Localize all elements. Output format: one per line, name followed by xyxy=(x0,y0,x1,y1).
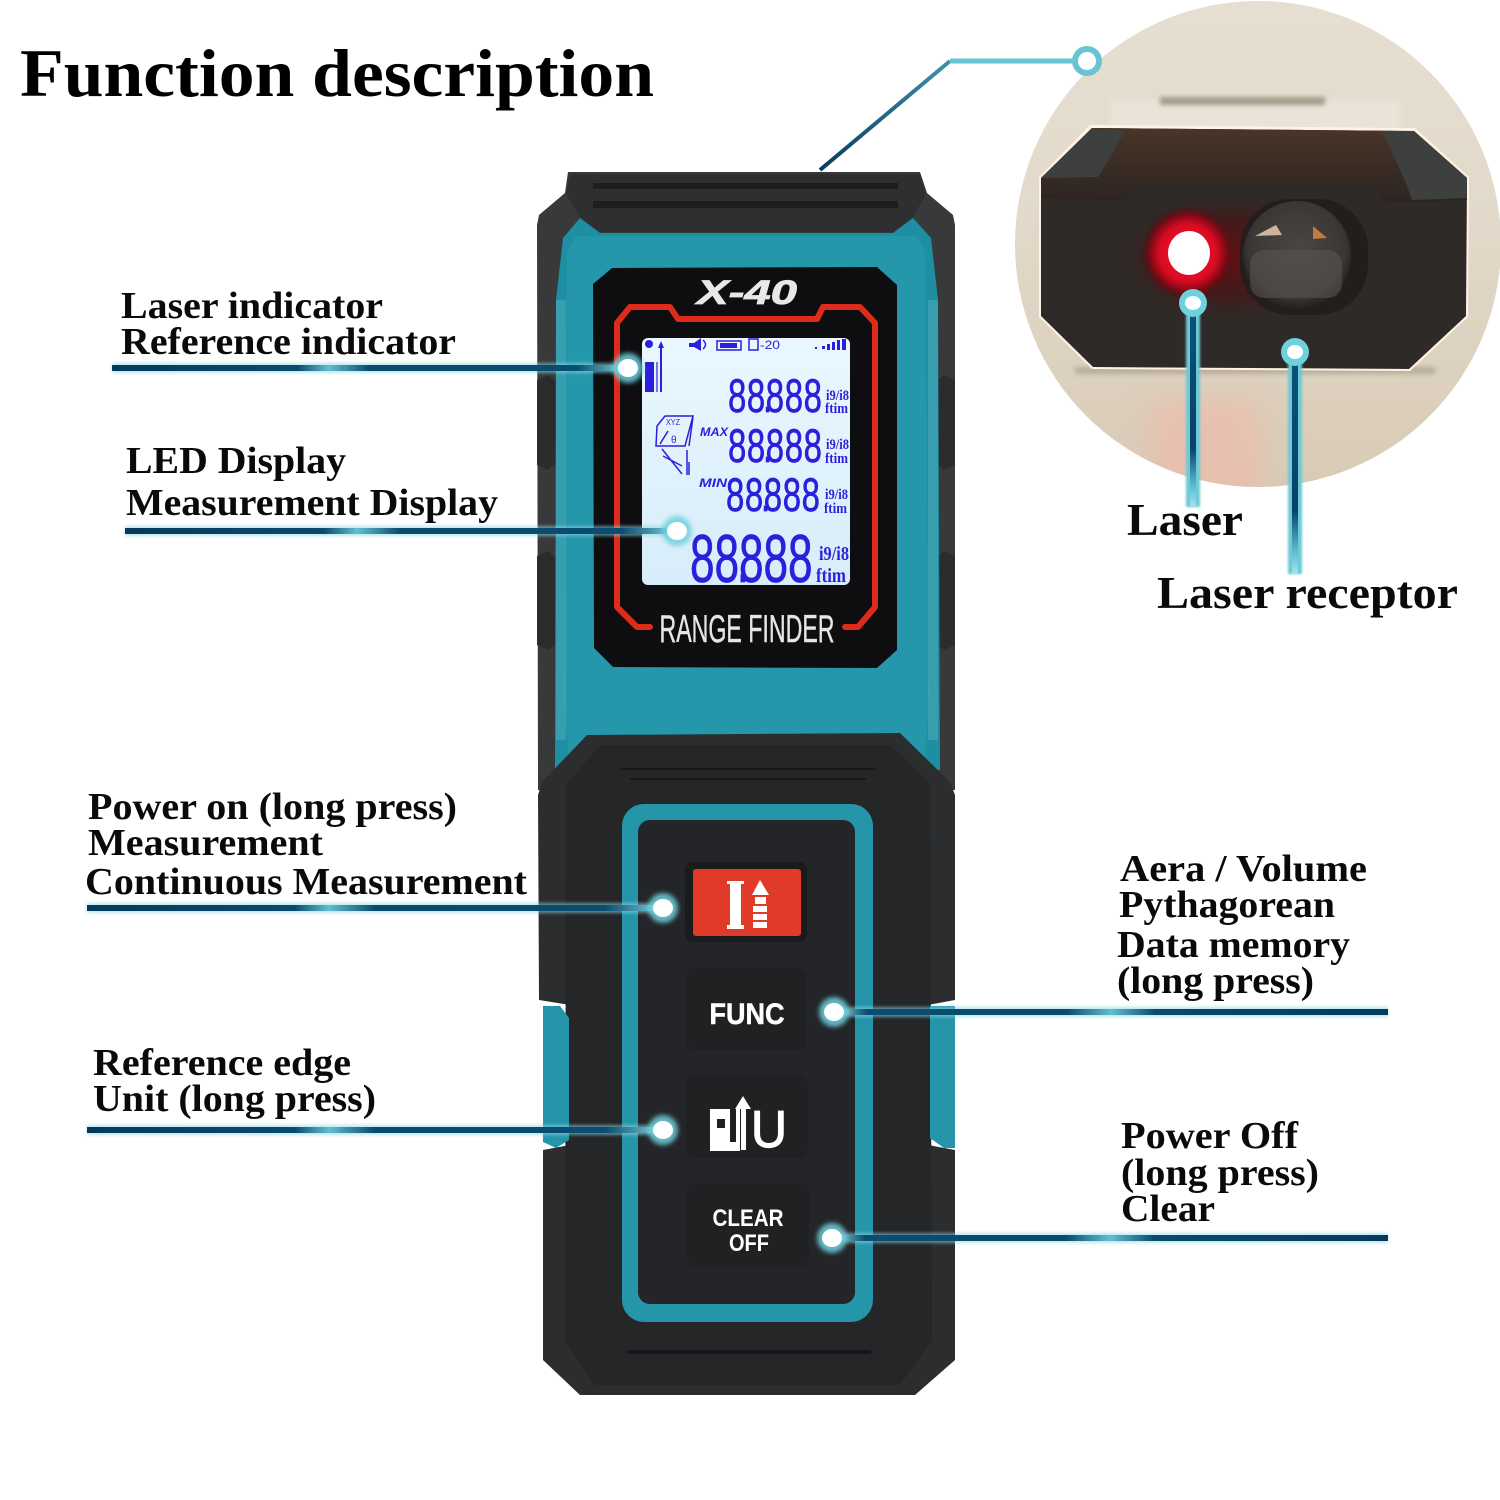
callout: power on xyxy=(87,893,678,923)
angle and volume icon: XYZ xyxy=(666,418,680,427)
side bumpers xyxy=(537,375,955,650)
label: laser indicator: Laser indicator xyxy=(121,285,383,327)
LCD display xyxy=(642,338,850,597)
callout: laser indicator xyxy=(112,353,643,383)
label: laser indicator: Reference indicator xyxy=(121,321,456,363)
model name: X-40 xyxy=(694,274,797,312)
button: CLEAR OFF: CLEAR xyxy=(712,1205,784,1232)
callout connector: device top to detail circle xyxy=(820,49,1099,170)
right teal side strip xyxy=(930,1006,955,1148)
device body xyxy=(537,172,955,1395)
teal keypad ring xyxy=(622,804,873,1322)
MIN label: MIN xyxy=(699,476,727,490)
label: laser: Laser xyxy=(1127,494,1243,545)
label: area volume: (long press) xyxy=(1117,960,1314,1002)
top cap band xyxy=(566,174,926,232)
button: measure (red) xyxy=(685,862,807,942)
lower grooves xyxy=(620,768,876,770)
digits row 1: ftim xyxy=(825,401,848,417)
digits row 4: 88.888 xyxy=(690,522,813,597)
label: power off: (long press) xyxy=(1121,1152,1319,1194)
label: LED display xyxy=(126,440,498,524)
button: unit xyxy=(686,1075,808,1159)
button: FUNC xyxy=(686,968,807,1050)
label: power on xyxy=(85,786,527,903)
MAX label: MAX xyxy=(700,425,729,439)
detail circle background xyxy=(1015,1,1500,487)
label: LED display: Measurement Display xyxy=(126,482,498,524)
status icons: -20 xyxy=(760,338,780,352)
status icons xyxy=(645,338,846,392)
label: power on: Power on (long press) xyxy=(88,786,457,828)
label: power off: Clear xyxy=(1121,1188,1215,1230)
panel: laser detail circle xyxy=(1015,1,1500,510)
digits row 2: i9/i8 xyxy=(826,437,849,453)
title: Function description xyxy=(20,35,654,111)
digits row 3: ftim xyxy=(824,501,847,517)
lower housing xyxy=(538,733,955,1395)
digits row 1: 88.888 xyxy=(728,369,822,422)
left teal side strip xyxy=(543,1006,569,1148)
label: area volume: Aera / Volume xyxy=(1120,848,1367,890)
digits row 3: 88.888 xyxy=(726,468,820,521)
laser spot xyxy=(1168,231,1210,275)
unit letter: U xyxy=(751,1101,787,1159)
red screen outline xyxy=(617,307,875,627)
digits row 1: i9/i8 xyxy=(826,388,849,404)
label: laser indicator xyxy=(121,285,456,363)
lens housing xyxy=(1240,199,1368,315)
label: reference edge: Reference edge xyxy=(93,1042,351,1084)
red glow xyxy=(1110,190,1350,326)
digits row 4: i9/i8 xyxy=(819,543,849,565)
rangefinder front face xyxy=(1039,125,1469,371)
blurred background surface xyxy=(1075,97,1435,510)
callout: CLEAR OFF xyxy=(817,1223,1388,1253)
callout: laser xyxy=(1179,289,1207,507)
face cap xyxy=(1041,128,1467,203)
callout: laser receptor xyxy=(1281,338,1309,574)
callout: LED display xyxy=(125,516,692,546)
top grooves xyxy=(593,183,898,189)
button: CLEAR OFF: OFF xyxy=(729,1230,769,1257)
button: FUNC: FUNC xyxy=(710,998,784,1031)
label: power on: Continuous Measurement xyxy=(85,861,527,903)
screen bezel xyxy=(593,267,897,668)
label: laser receptor: Laser receptor xyxy=(1157,567,1458,618)
label: area volume xyxy=(1117,848,1367,1002)
callout: reference edge xyxy=(87,1115,678,1145)
digits row 3: i9/i8 xyxy=(825,487,848,503)
label: area volume: Data memory xyxy=(1117,924,1350,966)
digits row 2: ftim xyxy=(825,451,848,467)
bottom groove xyxy=(627,1350,871,1354)
label: power on: Measurement xyxy=(88,822,323,864)
label: reference edge: Unit (long press) xyxy=(93,1078,376,1120)
label: area volume: Pythagorean xyxy=(1119,884,1335,926)
callout: FUNC xyxy=(819,997,1388,1027)
icon: reference edge xyxy=(710,1109,740,1151)
upper housing xyxy=(537,172,955,790)
teal face panel xyxy=(555,218,940,770)
angle and volume icon: θ xyxy=(671,435,677,446)
label: power off xyxy=(1121,1115,1319,1230)
label: reference edge xyxy=(93,1042,376,1120)
label: power off: Power Off xyxy=(1121,1115,1299,1157)
icon: up arrow xyxy=(752,880,769,928)
label: LED display: LED Display xyxy=(126,440,346,482)
angle and volume icon xyxy=(656,416,693,475)
digits row 4: ftim xyxy=(816,565,846,587)
button: CLEAR OFF xyxy=(687,1184,809,1267)
keypad inset xyxy=(638,820,855,1304)
icon: measure bar xyxy=(727,881,744,929)
digits row 2: 88.888 xyxy=(728,419,822,472)
brand label: RANGE FINDER xyxy=(660,608,834,651)
